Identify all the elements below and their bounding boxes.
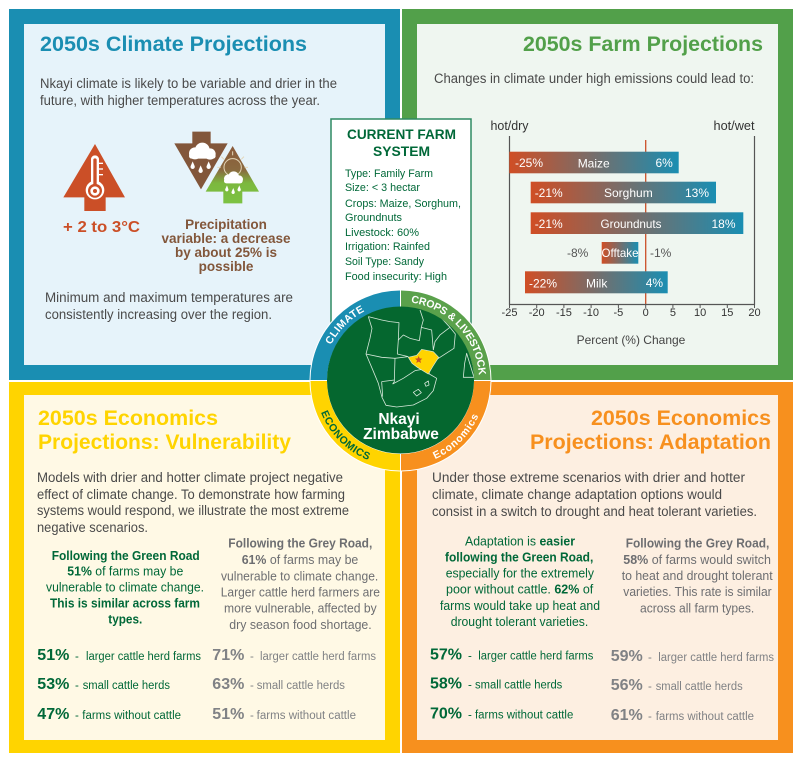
stats: grey road adaptation: small cattle herds [656, 681, 743, 693]
text: grey road adaptation [622, 537, 773, 615]
label: Nkayi Zimbabwe: Zimbabwe [363, 426, 439, 443]
text: green road adaptation: following the Green Road, [445, 551, 593, 565]
heading: adaptation [530, 407, 771, 454]
bar: maize: 6% [656, 156, 673, 170]
text: farm details: Irrigation: Rainfed [345, 241, 430, 253]
heading: vulnerability [38, 407, 291, 454]
text: green road adaptation: drought tolerant varieties. [451, 615, 588, 629]
stats: green road adaptation: larger cattle herd farms [478, 650, 594, 662]
text: grey road vulnerability [221, 537, 380, 632]
text: climate intro: future, with higher temperatures across the year. [40, 93, 320, 108]
panel: farm projections [402, 9, 793, 380]
stats: green road adaptation: - [468, 679, 472, 691]
stats: green road vulnerability: small cattle herds [83, 680, 170, 692]
label: Nkayi Zimbabwe [363, 411, 439, 443]
ring segment: economics vulnerability [310, 381, 400, 470]
panel: current farm system [331, 119, 471, 339]
axis labels: -25 [502, 307, 517, 319]
bar: sorghum: -21% [535, 186, 563, 200]
stats: grey road adaptation: 59% [611, 648, 643, 665]
text: grey road adaptation: across all farm types. [640, 601, 754, 615]
text: farm details: Food insecurity: High [345, 271, 447, 283]
ring segment: climate: CLIMATE [326, 305, 364, 344]
heading: adaptation: 2050s Economics [591, 407, 771, 430]
label: Nkayi Zimbabwe: Nkayi [378, 411, 420, 428]
stats: green road vulnerability: 53% [37, 676, 69, 693]
text: adaptation intro: climate, climate change adaptation options would [432, 487, 722, 502]
text: grey road vulnerability: 61% of farms may be [242, 553, 358, 567]
stats: grey road adaptation: - [648, 681, 652, 693]
text: climate intro [40, 76, 337, 108]
heading: climate projections: 2050s Climate Projections [40, 33, 307, 56]
ring segment: crops and livestock: CROPS & LIVESTOCK [412, 296, 486, 375]
stats: green road vulnerability [37, 647, 201, 723]
text: vulnerability intro: systems would respond, we illustrate the most extreme [37, 503, 349, 518]
stats: green road adaptation: 57% [430, 646, 462, 663]
text: precipitation change: possible [199, 259, 254, 274]
text: precipitation change [161, 217, 291, 274]
stats: green road vulnerability: larger cattle herd farms [86, 651, 201, 663]
axis labels: -10 [583, 307, 599, 319]
stats: green road adaptation: - [468, 709, 472, 721]
panel: economics adaptation [402, 382, 793, 753]
text: green road adaptation: especially for the extremely [446, 567, 595, 581]
ring segment: climate [310, 290, 400, 380]
text: grey road adaptation: 58% of farms would switch [623, 553, 771, 567]
stats: grey road adaptation: farms without cattle [656, 711, 754, 723]
bar: offtake: -1% [650, 246, 672, 260]
text: adaptation intro [432, 470, 757, 519]
text: adaptation intro: Under those extreme scenarios with drier and hotter [432, 470, 746, 485]
stats: green road vulnerability: - [75, 680, 79, 692]
text: vulnerability intro [37, 470, 349, 535]
text: grey road vulnerability: Larger cattle herd farmers are [221, 586, 380, 600]
bar: offtake: Offtake [602, 246, 639, 260]
bar: milk: Milk [586, 276, 608, 290]
text: farm details: Livestock: 60% [345, 227, 419, 239]
heading: adaptation: Projections: Adaptation [530, 431, 771, 454]
text: adaptation intro: consist in a switch to drought and heat tolerant varieties. [432, 504, 757, 519]
bar: groundnuts: 18% [712, 217, 736, 231]
text: precipitation change: variable: a decrease [161, 231, 291, 246]
text: farm details [345, 168, 461, 283]
stats: green road adaptation: small cattle herds [475, 679, 563, 691]
text: green road vulnerability [46, 549, 204, 627]
axis labels: 0 [643, 307, 649, 319]
bar: maize: -25% [515, 156, 543, 170]
text: temperature trend [45, 290, 293, 322]
stats: green road adaptation: 70% [430, 705, 462, 722]
stats: grey road vulnerability [212, 647, 376, 723]
text: green road vulnerability: vulnerable to climate change. [46, 581, 204, 595]
axis labels: -5 [614, 307, 623, 319]
bar: milk: 4% [646, 276, 663, 290]
heading: current farm system: CURRENT FARM [347, 127, 456, 142]
text: temperature trend: Minimum and maximum temperatures are [45, 290, 293, 305]
panel: climate projections [9, 9, 400, 380]
stats: grey road vulnerability: - [250, 651, 254, 663]
map: southern Africa [327, 306, 474, 454]
bar: sorghum: Sorghum [604, 186, 653, 200]
text: vulnerability intro: Models with drier and hotter climate project negative [37, 470, 343, 485]
heading: current farm system [347, 127, 456, 159]
bar: sorghum [531, 182, 716, 203]
text: farm details: Groundnuts [345, 212, 402, 224]
text: green road adaptation: poor without cattle. 62% of [446, 583, 594, 597]
bar chart: percent change by crop [490, 119, 761, 347]
text: farm details: Type: Family Farm [345, 168, 433, 180]
stats: green road adaptation: - [468, 650, 472, 662]
icon: thermometer arrow [63, 144, 125, 211]
bar: maize [509, 152, 679, 173]
bar: groundnuts: Groundnuts [600, 217, 662, 231]
ring segment: economics adaptation [401, 381, 490, 470]
heading: vulnerability: Projections: Vulnerability [38, 431, 291, 454]
text: green road adaptation: farms would take up heat and [440, 599, 600, 613]
text: farm details: Crops: Maize, Sorghum, [345, 198, 461, 210]
stats: grey road vulnerability: - [250, 710, 254, 722]
text: temperature trend: consistently increasing over the region. [45, 307, 272, 322]
circle badge: Nkayi Zimbabwe [310, 290, 492, 472]
stats: green road adaptation: 58% [430, 675, 462, 692]
text: grey road adaptation: to heat and drought tolerant [622, 569, 773, 583]
bar chart: percent change by crop: hot/dry [490, 119, 529, 133]
text: grey road vulnerability: more vulnerable, affected by [224, 602, 377, 616]
stats: green road vulnerability: 51% [37, 647, 69, 664]
bar: groundnuts [531, 212, 743, 234]
stats: green road vulnerability: - [75, 651, 79, 663]
text: green road vulnerability: Following the Green Road [52, 549, 200, 563]
text: green road adaptation [440, 535, 600, 629]
text: green road vulnerability: types. [108, 613, 142, 627]
ring segment: economics adaptation: Economics [432, 414, 478, 459]
stats: grey road vulnerability: 71% [212, 647, 244, 664]
heading: current farm system: SYSTEM [373, 144, 430, 159]
stats: green road vulnerability: - [75, 710, 79, 722]
text: precipitation change: by about 25% is [175, 245, 277, 260]
text: green road adaptation: Adaptation is easier [465, 535, 575, 549]
text: climate intro: Nkayi climate is likely to be variable and drier in the [40, 76, 337, 91]
stats: green road adaptation: farms without cattle [475, 709, 573, 721]
stats: grey road adaptation [611, 648, 774, 724]
text: grey road vulnerability: vulnerable to climate change. [221, 570, 378, 584]
bar: maize: Maize [578, 156, 610, 170]
bar: groundnuts: -21% [535, 217, 563, 231]
stats: grey road vulnerability: farms without cattle [257, 710, 356, 722]
stats: grey road adaptation: larger cattle herd farms [658, 652, 774, 664]
axis labels [502, 307, 761, 319]
axis labels: 10 [694, 307, 706, 319]
stats: grey road adaptation: - [648, 652, 652, 664]
axis labels: -15 [556, 307, 572, 319]
stats: green road vulnerability: 47% [37, 706, 69, 723]
stats: grey road vulnerability: 63% [212, 676, 244, 693]
axis labels: -20 [529, 307, 545, 319]
text: farm details: Soil Type: Sandy [345, 256, 424, 268]
text: green road vulnerability: This is similar across farm [50, 597, 200, 611]
text: precipitation change: Precipitation [185, 217, 267, 232]
stats: grey road vulnerability: 51% [212, 706, 244, 723]
bar: milk [525, 271, 668, 293]
text: temperature change: + 2 to 3°C [63, 219, 140, 236]
text: grey road vulnerability: dry season food shortage. [229, 618, 372, 632]
bar: sorghum: 13% [685, 186, 709, 200]
text: vulnerability intro: effect of climate change. To demonstrate how farming [37, 487, 345, 502]
text: vulnerability intro: negative scenarios. [37, 520, 148, 535]
axis title: Percent (%) Change [577, 333, 686, 347]
text: grey road adaptation: varieties. This rate is similar [623, 585, 772, 599]
text: farm details: Size: < 3 hectar [345, 182, 420, 194]
heading: vulnerability: 2050s Economics [38, 407, 218, 430]
stats: green road adaptation [430, 646, 594, 722]
panel: economics vulnerability [9, 382, 400, 753]
bar chart: percent change by crop: hot/wet [714, 119, 755, 133]
stats: grey road adaptation: - [648, 711, 652, 723]
text: green road vulnerability: 51% of farms may be [67, 565, 183, 579]
ring segment: economics vulnerability: ECONOMICS [321, 410, 370, 460]
icon: precipitation arrows [174, 132, 259, 203]
stats: grey road vulnerability: small cattle herds [257, 680, 345, 692]
text: grey road vulnerability: Following the Grey Road, [228, 537, 372, 551]
bar: milk: -22% [529, 276, 557, 290]
stats: grey road adaptation: 56% [611, 677, 643, 694]
stats: grey road vulnerability: - [250, 680, 254, 692]
axis labels: 15 [721, 307, 733, 319]
axis labels: 5 [670, 307, 676, 319]
bar: offtake [567, 242, 672, 264]
text: farm intro: Changes in climate under high emissions could lead to: [434, 71, 754, 86]
heading: farm projections: 2050s Farm Projections [523, 33, 763, 56]
stats: grey road vulnerability: larger cattle herd farms [260, 651, 376, 663]
axis labels: 20 [748, 307, 761, 319]
stats: grey road adaptation: 61% [611, 707, 643, 724]
text: grey road adaptation: Following the Grey Road, [626, 537, 769, 551]
map: Zimbabwe highlight and star [408, 349, 439, 374]
stats: green road vulnerability: farms without cattle [82, 710, 181, 722]
bar: offtake: -8% [567, 246, 589, 260]
